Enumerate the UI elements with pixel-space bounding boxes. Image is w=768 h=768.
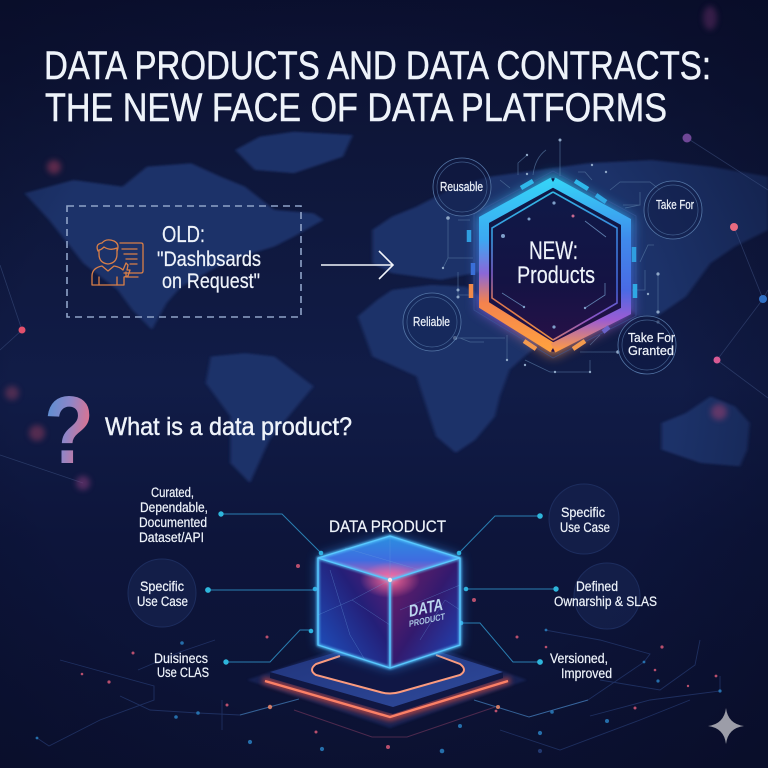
label: business use clas [154,651,209,680]
label: curated dataset: Curated, [151,485,194,500]
icon: person at screen [92,240,143,285]
panel: new products hexagon [442,138,660,373]
callout: take for [644,181,702,239]
label: specific use case right: Specific [561,505,605,520]
label: defined ownership [554,563,657,629]
label: curated dataset: Dependable, [140,500,208,515]
callout: take for granted: Take For [628,330,676,345]
label: business use clas: Duisinecs [154,651,208,666]
callout: reusable: Reusable [440,179,483,194]
platform [247,630,527,728]
title: THE NEW FACE OF DATA PLATFORMS [45,86,667,130]
label: specific use case left: Specific [140,579,184,594]
circuit traces [443,140,660,372]
callout: reliable: Reliable [413,314,450,329]
inner details [502,221,606,308]
callout: take for: Take For [656,197,694,212]
title [44,44,711,130]
label: specific use case right [549,484,619,554]
hexagon ring [474,171,636,358]
platform inner ring [312,655,464,694]
icon: question mark: ? [44,377,94,484]
network dots around edges [0,6,768,490]
text: old [157,221,261,293]
label: defined ownership: Ownarship & SLAS [554,594,657,609]
label: curated dataset [139,485,208,545]
label: specific use case right: Use Case [560,520,610,535]
circuit board background [36,564,722,753]
arrow [321,251,393,279]
label: versioned improved: Improved [561,666,612,681]
hexagon body [480,178,630,352]
label: versioned improved: Versioned, [550,651,608,666]
label: curated dataset: Dataset/API [139,530,204,545]
callout: reusable [433,158,491,216]
callout: reliable [403,293,461,351]
callout: take for granted [618,316,676,374]
glow [484,182,626,348]
text: cube face label: PRODUCT [409,611,445,629]
heading: data product: DATA PRODUCT [329,518,446,536]
hexagon accents [469,181,635,349]
text: new products: NEW: [529,237,578,265]
heading: what is a data product: What is a data product? [105,413,352,441]
label: specific use case left [128,559,196,627]
text: new products: Products [517,262,595,289]
text: old: OLD: [162,221,205,247]
panel: old dashboards [67,206,301,317]
label: business use clas: Use CLAS [157,665,209,680]
label: curated dataset: Documented [139,515,207,530]
label: versioned improved [550,651,612,681]
connector lines [205,511,559,665]
callout: take for granted: Granted [628,343,674,358]
text: cube face label: DATA [409,594,443,621]
text: old: on Request" [162,270,260,293]
text: old: "Dashbsards [157,248,261,271]
label: defined ownership: Defined [576,579,618,594]
icon: sparkle [708,708,744,744]
text: cube face label [409,593,445,629]
cube facets [318,536,460,660]
label: specific use case left: Use Case [137,594,188,609]
text: new products [517,237,595,289]
data product cube [318,536,460,668]
world map [24,132,768,483]
